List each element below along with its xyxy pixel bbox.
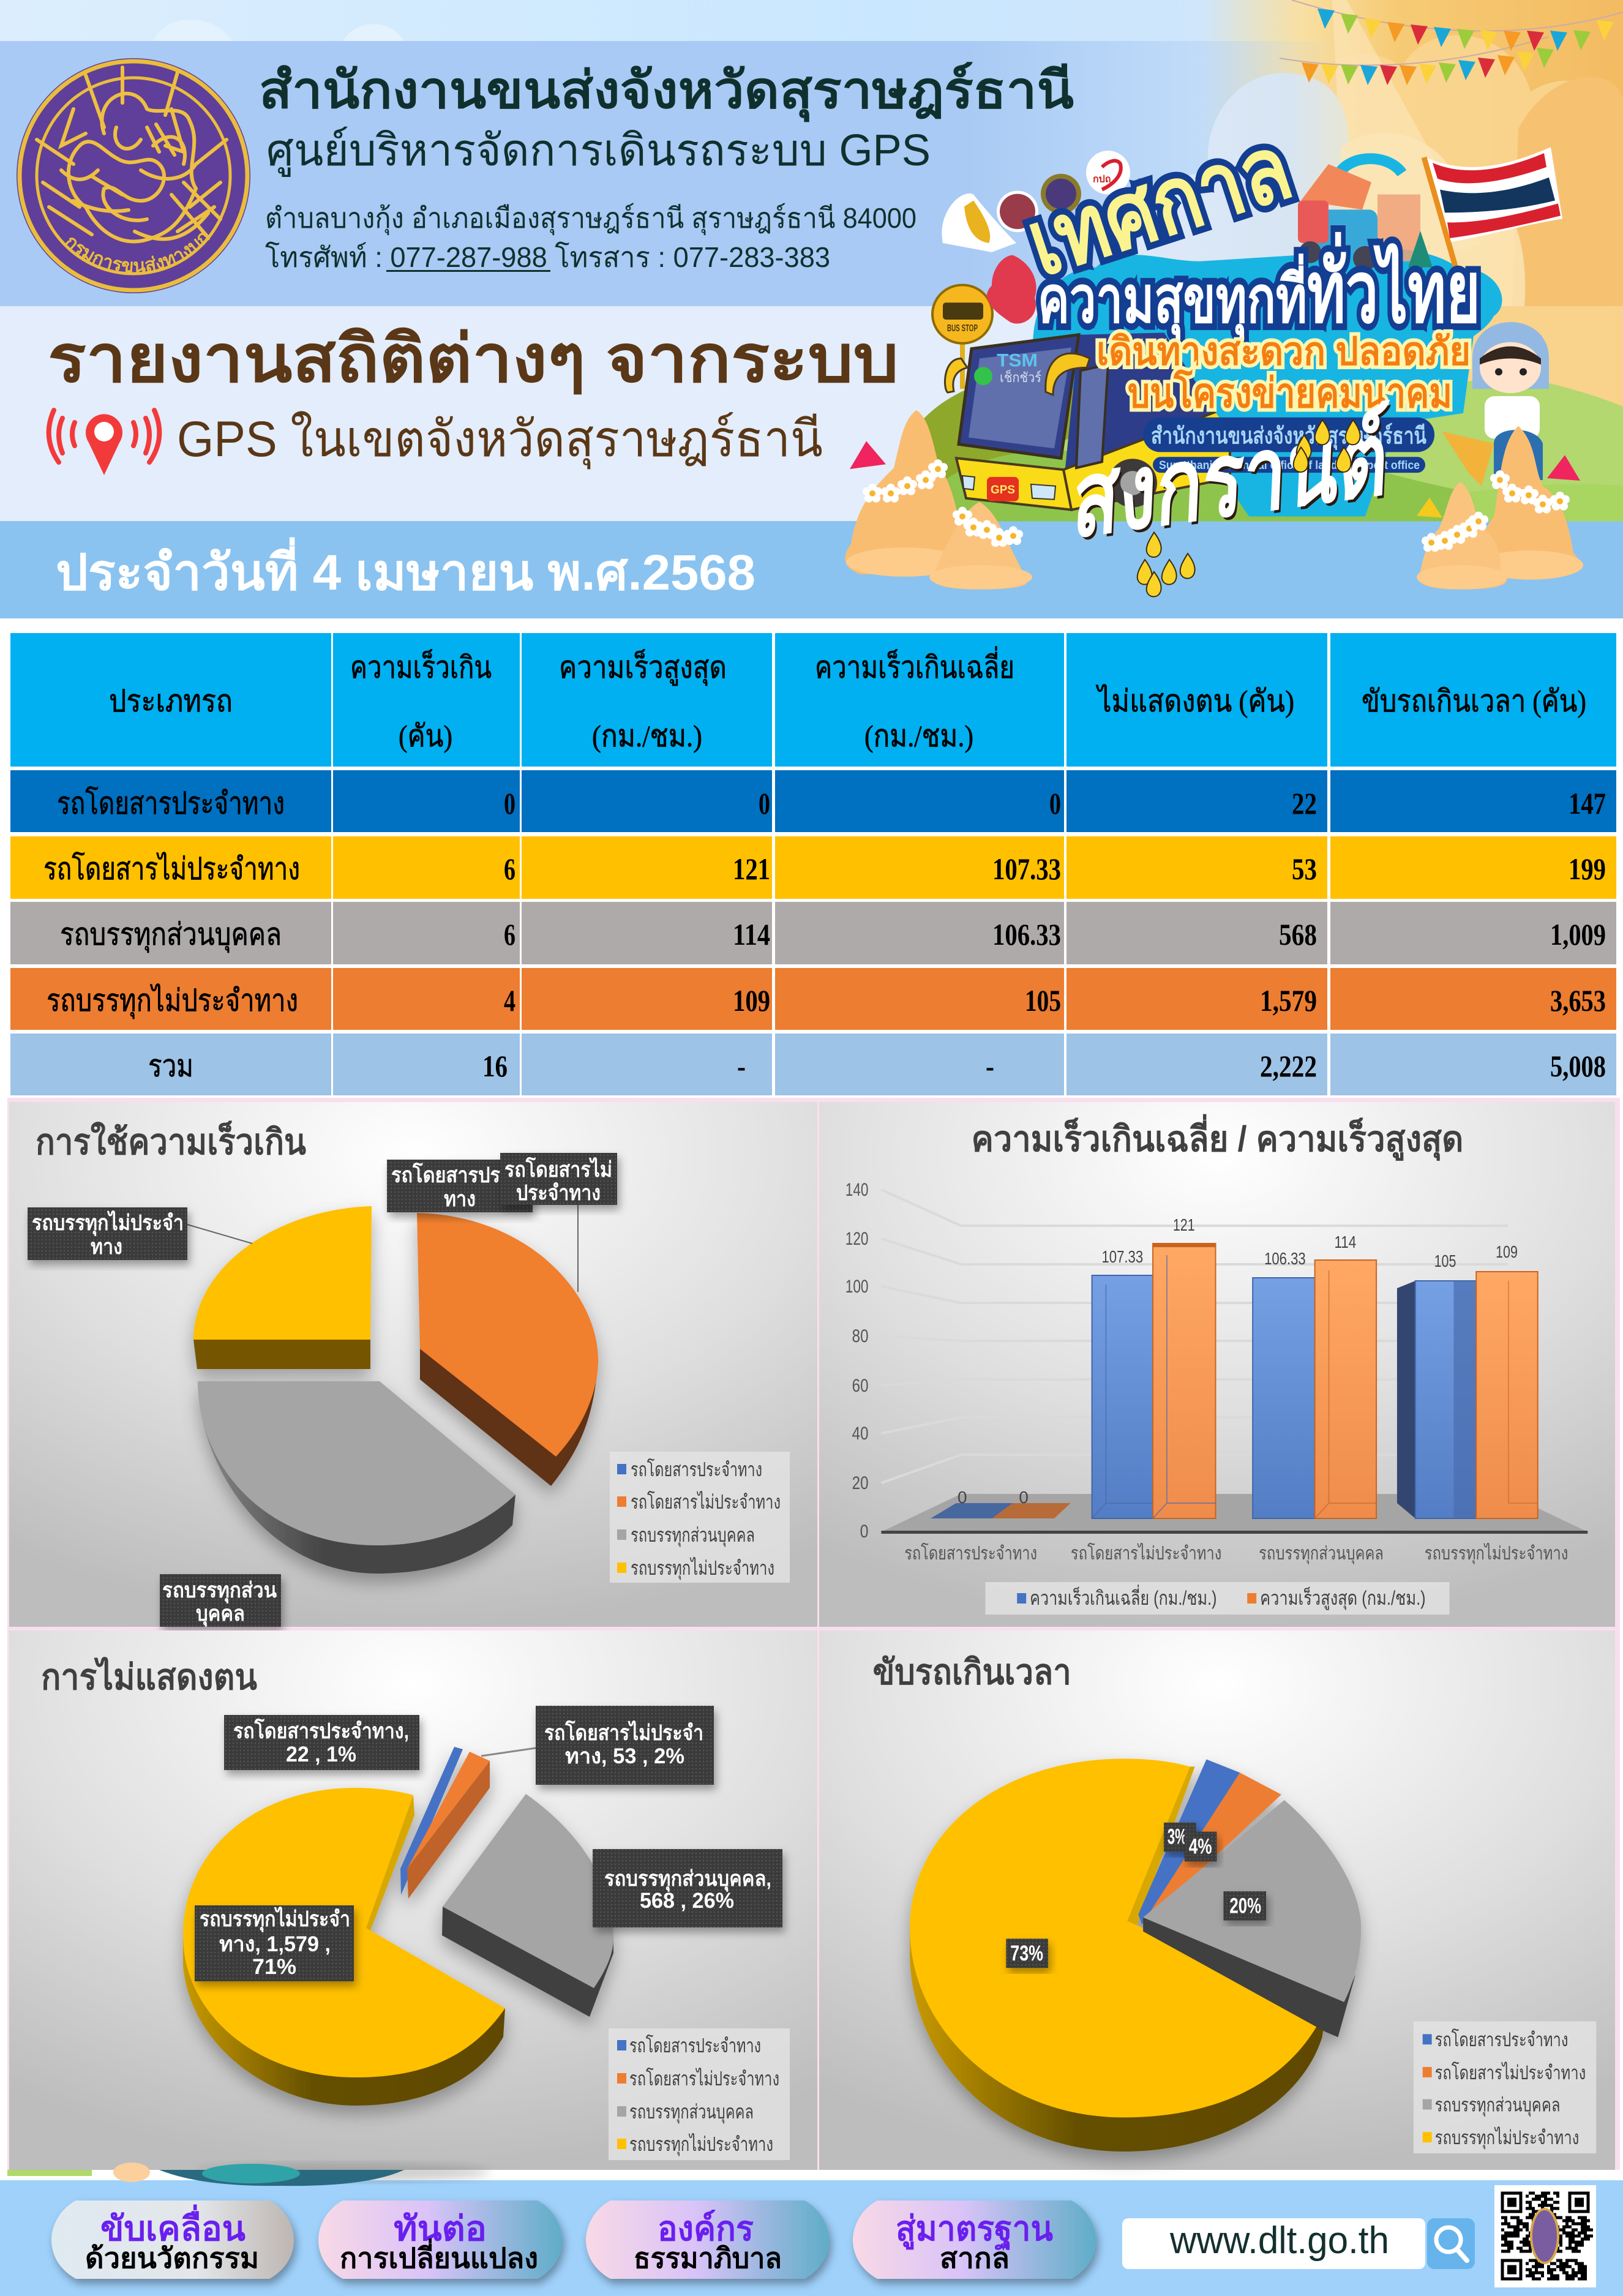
data label: non-fixed bus: ประจำทาง <box>516 1181 601 1205</box>
data label: non-fixed truck: รถบรรทุกไม่ประจำ <box>32 1210 184 1236</box>
data label: non-fixed truck <box>195 1905 354 1981</box>
office pill: สำนักงานขนส่งจังหวัดสุราษฎร์ธานี <box>1151 423 1426 450</box>
category labels <box>904 1542 1568 1564</box>
row: total <box>10 1034 1616 1095</box>
data label: non-fixed truck: 71% <box>252 1955 296 1979</box>
row: fixed-route bus: รถโดยสารประจำทาง <box>57 786 285 820</box>
category labels: รถบรรทุกส่วนบุคคล <box>1259 1544 1384 1564</box>
legend <box>1414 2021 1596 2153</box>
pie slices <box>910 1758 1361 2152</box>
data label 20% <box>1223 1891 1266 1921</box>
icon: GPS signal pin <box>49 410 159 475</box>
table header row: ความเร็วเกิน <box>350 649 492 685</box>
office english pill: Suratthani Provincial office of land transport office <box>1159 459 1420 472</box>
pill: change: การเปลี่ยนแปลง <box>340 2238 538 2274</box>
legend: รถโดยสารประจำทาง <box>631 1458 762 1480</box>
bus: GPS <box>991 483 1015 497</box>
row: non-fixed-route truck <box>10 968 1616 1030</box>
campaign line: safe travel: เดินทางสะดวก ปลอดภัย <box>1096 329 1471 373</box>
category labels: รถโดยสารประจำทาง <box>904 1542 1037 1564</box>
data label 73% <box>1006 1938 1048 1968</box>
data label: non-fixed truck: รถบรรทุกไม่ประจำ <box>200 1906 350 1932</box>
campaign title: festival: เทศกาล <box>1015 116 1303 295</box>
department seal logo: กรมการขนส่งทางบก <box>66 233 210 272</box>
legend: รถบรรทุกไม่ประจำทาง <box>1435 2126 1579 2150</box>
chart title: ความเร็วเกินเฉลี่ย / ความเร็วสูงสุด <box>972 1114 1463 1161</box>
pill: governance <box>586 2200 829 2279</box>
pill: governance: องค์กร <box>658 2209 754 2248</box>
data label: fixed bus <box>387 1160 533 1212</box>
script title: Songkran: สงกรานต์ <box>1059 399 1404 559</box>
data label 4%: 4% <box>1189 1835 1212 1858</box>
data label: non-fixed bus: ทาง, 53 , 2% <box>565 1744 684 1768</box>
legend: ความเร็วสูงสุด (กม./ชม.) <box>1260 1586 1426 1610</box>
small logos: กปถ <box>1093 174 1111 185</box>
icon: search <box>1427 2218 1475 2269</box>
illustration: Songkran campaign artwork <box>845 116 1623 596</box>
category labels: รถบรรทุกไม่ประจำทาง <box>1425 1543 1568 1564</box>
table header row: ไม่แสดงตน (คัน) <box>1095 684 1294 718</box>
bars: non-fixed bus: 121 <box>1173 1215 1195 1234</box>
address: ตำบลบางกุ้ง อำเภอเมืองสุราษฎร์ธานี สุราษฎร์ธานี 84000 <box>265 202 916 236</box>
campaign title: happiness: ทั่วไทย <box>1307 232 1480 340</box>
chart title: ขับรถเกินเวลา <box>872 1653 1071 1692</box>
bars: private truck: 106.33 <box>1264 1249 1306 1268</box>
panel: no driver ID pie chart <box>9 1630 817 2170</box>
office pill <box>1143 418 1434 452</box>
department seal logo <box>17 58 250 293</box>
table header row: ประเภทรถ <box>109 684 233 718</box>
data label 3% <box>1164 1823 1196 1851</box>
subtitle: GPS in province: GPS ในเขตจังหวัดสุราษฎร์ธานี <box>177 411 823 470</box>
report title: รายงานสถิติต่างๆ จากระบบ <box>48 321 899 396</box>
data label: non-fixed bus <box>500 1153 617 1205</box>
y axis labels <box>845 1180 869 1542</box>
row: non-fixed-route bus: 107.33 <box>992 852 1061 886</box>
bus stop sign <box>932 285 992 389</box>
panel: overtime driving pie chart <box>819 1630 1615 2170</box>
row: total: 2,222 <box>1260 1049 1317 1083</box>
row: private truck: 6 <box>504 917 515 951</box>
data label 73%: 73% <box>1010 1942 1043 1965</box>
category labels: รถโดยสารไม่ประจำทาง <box>1071 1542 1221 1564</box>
icon: bunting flags <box>1280 0 1623 85</box>
row: non-fixed-route truck: 3,653 <box>1550 983 1606 1018</box>
peeking illustration under charts <box>7 2163 490 2186</box>
bottom date band <box>0 521 1623 618</box>
data label: private truck <box>160 1574 281 1627</box>
data label: non-fixed bus: รถโดยสารไม่ <box>504 1157 612 1182</box>
y axis labels: 140 <box>845 1180 869 1200</box>
row: non-fixed-route truck: 1,579 <box>1260 983 1317 1018</box>
pill: international standard <box>853 2200 1096 2279</box>
data label: private truck <box>593 1849 782 1927</box>
pie slices <box>193 1206 598 1574</box>
bars: fixed bus: 0 <box>1019 1488 1029 1507</box>
bars: non-fixed bus <box>1092 1215 1216 1518</box>
row: fixed-route bus: 0 <box>759 786 770 820</box>
row: fixed-route bus: 22 <box>1292 786 1317 820</box>
heading: office name: สำนักงานขนส่งจังหวัดสุราษฎร์ธานี <box>259 61 1074 122</box>
script title: Songkran: สงกรานต์ <box>1061 402 1406 563</box>
table <box>10 633 1616 1095</box>
data label: private truck: รถบรรทุกส่วนบุคคล, <box>604 1867 771 1892</box>
bus: TSM <box>997 351 1038 370</box>
legend: รถบรรทุกส่วนบุคคล <box>631 1524 755 1547</box>
row: total: - <box>986 1049 994 1083</box>
data label: private truck: 568 , 26% <box>640 1889 734 1913</box>
bus stop sign: BUS STOP <box>947 323 978 334</box>
hills <box>918 377 1623 521</box>
data label: non-fixed truck: ทาง <box>91 1235 122 1259</box>
panel: speeding pie chart <box>9 1102 817 1627</box>
y axis labels: 120 <box>845 1229 869 1249</box>
table header row: ขับรถเกินเวลา (คัน) <box>1362 684 1586 718</box>
row: total: 16 <box>482 1049 508 1083</box>
pill: international standard: สากล <box>940 2242 1010 2274</box>
bars: non-fixed bus: 107.33 <box>1101 1247 1143 1266</box>
legend: รถโดยสารประจำทาง <box>1435 2028 1568 2050</box>
row: total: - <box>737 1049 746 1083</box>
table header row: (กม./ชม.) <box>864 719 973 753</box>
date: ประจำวันที่ 4 เมษายน พ.ศ.2568 <box>56 537 755 601</box>
row: total: 5,008 <box>1550 1049 1606 1083</box>
legend: รถบรรทุกส่วนบุคคล <box>629 2101 754 2124</box>
campaign title: happiness <box>1038 232 1480 340</box>
table header row: ความเร็วสูงสุด <box>559 649 727 686</box>
pie slices <box>183 1747 613 2106</box>
website search box: www.dlt.go.th <box>1169 2219 1389 2262</box>
hibiscus flower <box>987 255 1036 324</box>
row: non-fixed-route bus: 53 <box>1292 852 1317 886</box>
row: private truck <box>10 902 1616 964</box>
y axis labels: 40 <box>852 1424 869 1444</box>
header background <box>0 0 1623 618</box>
Thai flag <box>1424 147 1562 275</box>
water ring <box>1338 159 1402 176</box>
row: fixed-route bus: 147 <box>1569 786 1606 820</box>
row: private truck: 114 <box>733 917 770 951</box>
y axis labels: 80 <box>852 1326 869 1346</box>
data label: private truck: บุคคล <box>196 1602 245 1627</box>
chart title: การใช้ความเร็วเกิน <box>36 1120 306 1162</box>
table header row: ความเร็วเกินเฉลี่ย <box>815 647 1014 685</box>
legend: รถโดยสารไม่ประจำทาง <box>631 1491 781 1513</box>
chart floor <box>881 1494 1587 1534</box>
y axis labels: 100 <box>845 1277 869 1297</box>
data label: fixed bus: ทาง <box>444 1187 476 1211</box>
pill: change: ทันต่อ <box>394 2209 487 2248</box>
y axis labels: 0 <box>860 1521 869 1542</box>
row: total: รวม <box>148 1049 193 1083</box>
bus <box>945 332 1230 510</box>
pill: innovation: ด้วยนวัตกรรม <box>85 2242 259 2274</box>
pill: innovation <box>51 2200 294 2279</box>
QR code <box>1494 2185 1596 2287</box>
pill: governance: ธรรมาภิบาล <box>634 2242 782 2274</box>
row: non-fixed-route bus: รถโดยสารไม่ประจำทาง <box>43 852 300 886</box>
legend: รถโดยสารไม่ประจำทาง <box>629 2068 779 2090</box>
row: fixed-route bus: 0 <box>1049 786 1061 820</box>
table header row <box>10 633 1616 767</box>
bars: non-fixed truck: 109 <box>1496 1242 1518 1261</box>
data label 3%: 3% <box>1168 1826 1187 1848</box>
rider character <box>1442 322 1549 486</box>
tuk tuk <box>1298 164 1433 271</box>
water splash behind <box>1033 247 1502 517</box>
chart title: การไม่แสดงตน <box>41 1657 257 1697</box>
data label: fixed bus <box>224 1715 419 1770</box>
row: private truck: 568 <box>1279 917 1317 951</box>
row: private truck: 106.33 <box>992 917 1061 951</box>
bars: non-fixed truck <box>1397 1242 1538 1518</box>
row: non-fixed-route bus: 199 <box>1569 852 1606 886</box>
data label: non-fixed bus: รถโดยสารไม่ประจำ <box>544 1720 703 1745</box>
phone and fax: โทรศัพท์ : 077-287-988 โทรสาร : 077-283-383 <box>265 241 830 273</box>
pill: innovation: ขับเคลื่อน <box>100 2204 246 2248</box>
data label: fixed bus: รถโดยสารปร <box>391 1162 500 1187</box>
legend: รถโดยสารประจำทาง <box>629 2035 761 2057</box>
pill: change <box>318 2200 562 2279</box>
website search box <box>1122 2218 1425 2269</box>
footer band <box>0 2180 1623 2296</box>
row: private truck: รถบรรทุกส่วนบุคคล <box>60 917 282 953</box>
y axis labels: 20 <box>852 1473 869 1493</box>
data label 20%: 20% <box>1229 1895 1261 1918</box>
data label: fixed bus: รถโดยสารประจำทาง, <box>233 1718 409 1743</box>
row: non-fixed-route truck: 109 <box>733 983 770 1018</box>
bars: fixed bus: 0 <box>958 1488 967 1507</box>
bars: fixed bus <box>931 1488 1071 1518</box>
bus: เช็กชัวร์ <box>1000 369 1041 385</box>
legend: รถบรรทุกส่วนบุคคล <box>1435 2093 1561 2117</box>
sand pagodas <box>845 410 1583 590</box>
water splash over bus <box>1163 322 1475 517</box>
row: fixed-route bus: 0 <box>504 786 515 820</box>
legend: รถบรรทุกไม่ประจำทาง <box>631 1557 774 1580</box>
row: non-fixed-route truck: 4 <box>504 983 515 1018</box>
data label 4% <box>1185 1832 1216 1861</box>
legend <box>609 2028 790 2160</box>
pill: international standard: สู่มาตรฐาน <box>896 2209 1053 2251</box>
table header row: (กม./ชม.) <box>592 719 702 753</box>
data label: private truck: รถบรรทุกส่วน <box>162 1578 277 1604</box>
bars: private truck: 114 <box>1334 1232 1356 1251</box>
water drops <box>1138 420 1360 596</box>
data label: non-fixed truck: ทาง, 1,579 , <box>219 1932 331 1956</box>
row: non-fixed-route bus <box>10 836 1616 899</box>
bars: private truck <box>1253 1232 1376 1518</box>
legend: ความเร็วเกินเฉลี่ย (กม./ชม.) <box>1030 1585 1216 1609</box>
data label: non-fixed truck <box>28 1207 187 1260</box>
data label: fixed bus: 22 , 1% <box>286 1743 356 1766</box>
data label: non-fixed bus <box>536 1706 714 1785</box>
panel: average and max speed bar chart <box>819 1102 1615 1627</box>
small logos <box>942 151 1130 252</box>
table header row: (คัน) <box>399 719 452 753</box>
row: private truck: 1,009 <box>1550 917 1606 951</box>
legend <box>986 1582 1449 1615</box>
row: fixed-route bus <box>10 770 1616 832</box>
campaign line: network: บนโครงข่ายคมนาคม <box>1128 369 1452 416</box>
row: non-fixed-route bus: 121 <box>733 852 770 886</box>
row: non-fixed-route bus: 6 <box>504 852 515 886</box>
row: non-fixed-route truck: 105 <box>1025 983 1061 1018</box>
y axis labels: 60 <box>852 1376 869 1396</box>
row: non-fixed-route truck: รถบรรทุกไม่ประจำทาง <box>47 983 298 1019</box>
legend <box>610 1452 790 1583</box>
bars: non-fixed truck: 105 <box>1434 1251 1456 1270</box>
campaign title: happiness: ความสุขทุกที่ <box>1038 253 1307 340</box>
legend: รถบรรทุกไม่ประจำทาง <box>629 2133 773 2156</box>
heading: GPS centre: ศูนย์บริหารจัดการเดินรถระบบ GPS <box>266 126 931 177</box>
